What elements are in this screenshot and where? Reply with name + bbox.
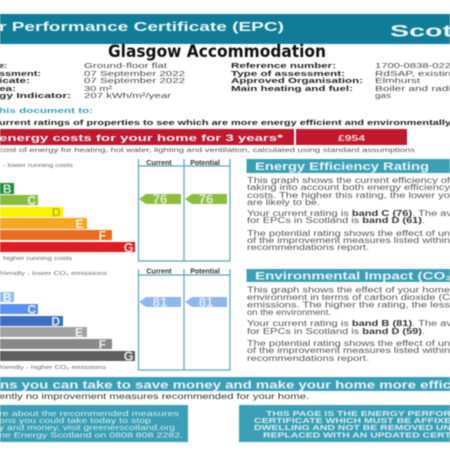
property details: right column: Approved Organisation: (231, 76, 363, 85)
panel: environmental impact text: Your current rating is band B (81) . The av (247, 319, 450, 328)
property details: left column: 07 September 2022 (84, 76, 185, 85)
action banner (0, 377, 450, 392)
energy cost banner: £954 (338, 133, 365, 143)
property details: right column: Main heating and fuel: (231, 84, 353, 93)
header band: Scot (390, 22, 450, 40)
chart: environmental impact rating: E (75, 326, 83, 340)
chart: environmental impact rating: Potential (190, 268, 220, 276)
chart: energy efficiency rating: Potential (190, 160, 220, 167)
property details: left column: gy Indicator: (0, 91, 71, 100)
panel: energy efficiency rating text: of the improvement measures listed within (247, 236, 450, 245)
title: Glasgow Accommodation (108, 42, 326, 61)
chart: environmental impact rating: 81 (153, 294, 167, 310)
panel: environmental impact text: Environmental Impact (CO₂ (255, 270, 450, 282)
panel: energy efficiency rating text: The potential rating shows the effect of un (247, 229, 450, 238)
panel: environmental impact text (246, 269, 450, 363)
chart: energy efficiency rating (0, 159, 230, 262)
panel: environmental impact text: recommendations report. (247, 354, 369, 363)
panel: environmental impact text: for EPCs in Scotland is band D (59) . (247, 327, 425, 336)
callout: certificate notice: DWELLING AND NOT BE REMOVED UN (254, 423, 450, 432)
property details: right column: gas (375, 91, 391, 100)
panel: energy efficiency rating text: for EPCs in Scotland is band D (61) . (247, 216, 425, 225)
property details: right column: 1700-0838-022 (375, 61, 450, 70)
callout: energy saving advice: y and money, visit greenerscotland.org (0, 423, 175, 432)
callout: energy saving advice: ne Energy Scotland on 0808 808 2282. (0, 430, 183, 440)
cost note: cost of energy for heating, hot water, lighting and ventilation, calculated using standard assumptions (0, 147, 415, 154)
callout: certificate notice: REPLACED WITH AN UPDATED CERT (263, 430, 450, 440)
property details: right column (231, 61, 450, 100)
property details: right column: Boiler and radi (375, 84, 450, 93)
energy cost banner: energy costs for your home for 3 years* (0, 133, 283, 144)
chart: energy efficiency rating: 76 (153, 192, 167, 206)
property details: right column: Type of assessment: (231, 69, 345, 78)
compare ratings line: urrent ratings of properties to see which are more energy efficient and environmentally (0, 118, 450, 127)
chart: energy efficiency rating: D (52, 206, 61, 220)
property details: left column: 207 kWh/m²/year (84, 91, 172, 100)
chart: energy efficiency rating: F (99, 228, 106, 242)
chart: environmental impact rating: G (124, 350, 134, 364)
chart: environmental impact rating: 81 (199, 294, 213, 310)
chart: energy efficiency rating: 76 (199, 192, 213, 206)
property details: left column: Ground-floor flat (84, 61, 168, 70)
panel: environmental impact text: emissions. The higher the rating, the less (247, 300, 450, 310)
panel: environmental impact text: on the environment. (247, 308, 331, 317)
chart: environmental impact rating (0, 268, 230, 371)
callout: certificate notice (239, 405, 450, 442)
panel: environmental impact text: The potential rating shows the effect of un (247, 339, 450, 348)
panel: energy efficiency rating text (246, 159, 450, 252)
callout: energy saving advice (0, 405, 188, 442)
action banner: ns you can take to save money and make your home more effic (0, 380, 450, 392)
callout: certificate notice: THIS PAGE IS THE ENERGY PERFOR (266, 409, 450, 418)
chart: energy efficiency rating: higher running costs (3, 256, 72, 262)
section heading: use this document: his document to: (0, 106, 93, 115)
panel: energy efficiency rating text: This graph shows the current efficiency of (247, 176, 450, 185)
header band (0, 14, 450, 44)
callout: energy saving advice: re about the recommended measures (0, 409, 179, 418)
panel: energy efficiency rating text: taking into account both energy efficiency (247, 183, 450, 192)
panel: energy efficiency rating text: Your current rating is band C (76) . The av (247, 209, 450, 218)
panel: energy efficiency rating text: costs. The higher this rating, the lower yo (247, 191, 450, 200)
chart: environmental impact rating: friendly - lower CO₂ emissions (0, 271, 107, 277)
chart: environmental impact rating: Current (146, 268, 172, 276)
property details: right column: Elmhurst (375, 76, 421, 85)
recommendations note: ently no improvement measures recommended for your home. (0, 392, 309, 401)
property details: right column: Reference number: (231, 61, 336, 70)
chart: energy efficiency rating: C (27, 194, 36, 208)
chart: energy efficiency rating: G (124, 241, 134, 255)
panel: energy efficiency rating text: Energy Efficiency Rating (255, 161, 429, 173)
panel: environmental impact text: This graph shows the effect of your home (247, 286, 450, 294)
chart: energy efficiency rating: Current (146, 160, 172, 167)
header band: r Performance Certificate (EPC) (0, 19, 284, 34)
callout: energy saving advice: ons you could take today to stop (0, 416, 151, 425)
panel: environmental impact text: environment in terms of carbon dioxide (C (247, 293, 450, 302)
property details: left column: 30 m² (84, 84, 113, 93)
chart: environmental impact rating: C (27, 302, 36, 316)
chart: environmental impact rating: B (3, 290, 12, 304)
panel: environmental impact text: of the improvement measures listed within (247, 346, 450, 355)
energy cost banner (0, 129, 407, 145)
chart: energy efficiency rating: E (75, 217, 84, 231)
panel: energy efficiency rating text: recommendations report. (247, 243, 369, 252)
property details: left column (0, 61, 185, 100)
chart: environmental impact rating: F (99, 338, 106, 352)
callout: certificate notice: CERTIFICATE WHICH MUST BE AFFIXE (254, 416, 450, 425)
property details: left column: 07 September 2022 (84, 69, 185, 78)
property details: right column: RdSAP, existin (375, 69, 450, 78)
panel: energy efficiency rating text: are likely to be. (247, 198, 320, 207)
chart: environmental impact rating: friendly - higher CO₂ emissions (0, 365, 106, 371)
chart: energy efficiency rating: B (3, 182, 12, 196)
chart: energy efficiency rating: - lower running costs (3, 163, 73, 169)
chart: environmental impact rating: D (51, 314, 60, 328)
